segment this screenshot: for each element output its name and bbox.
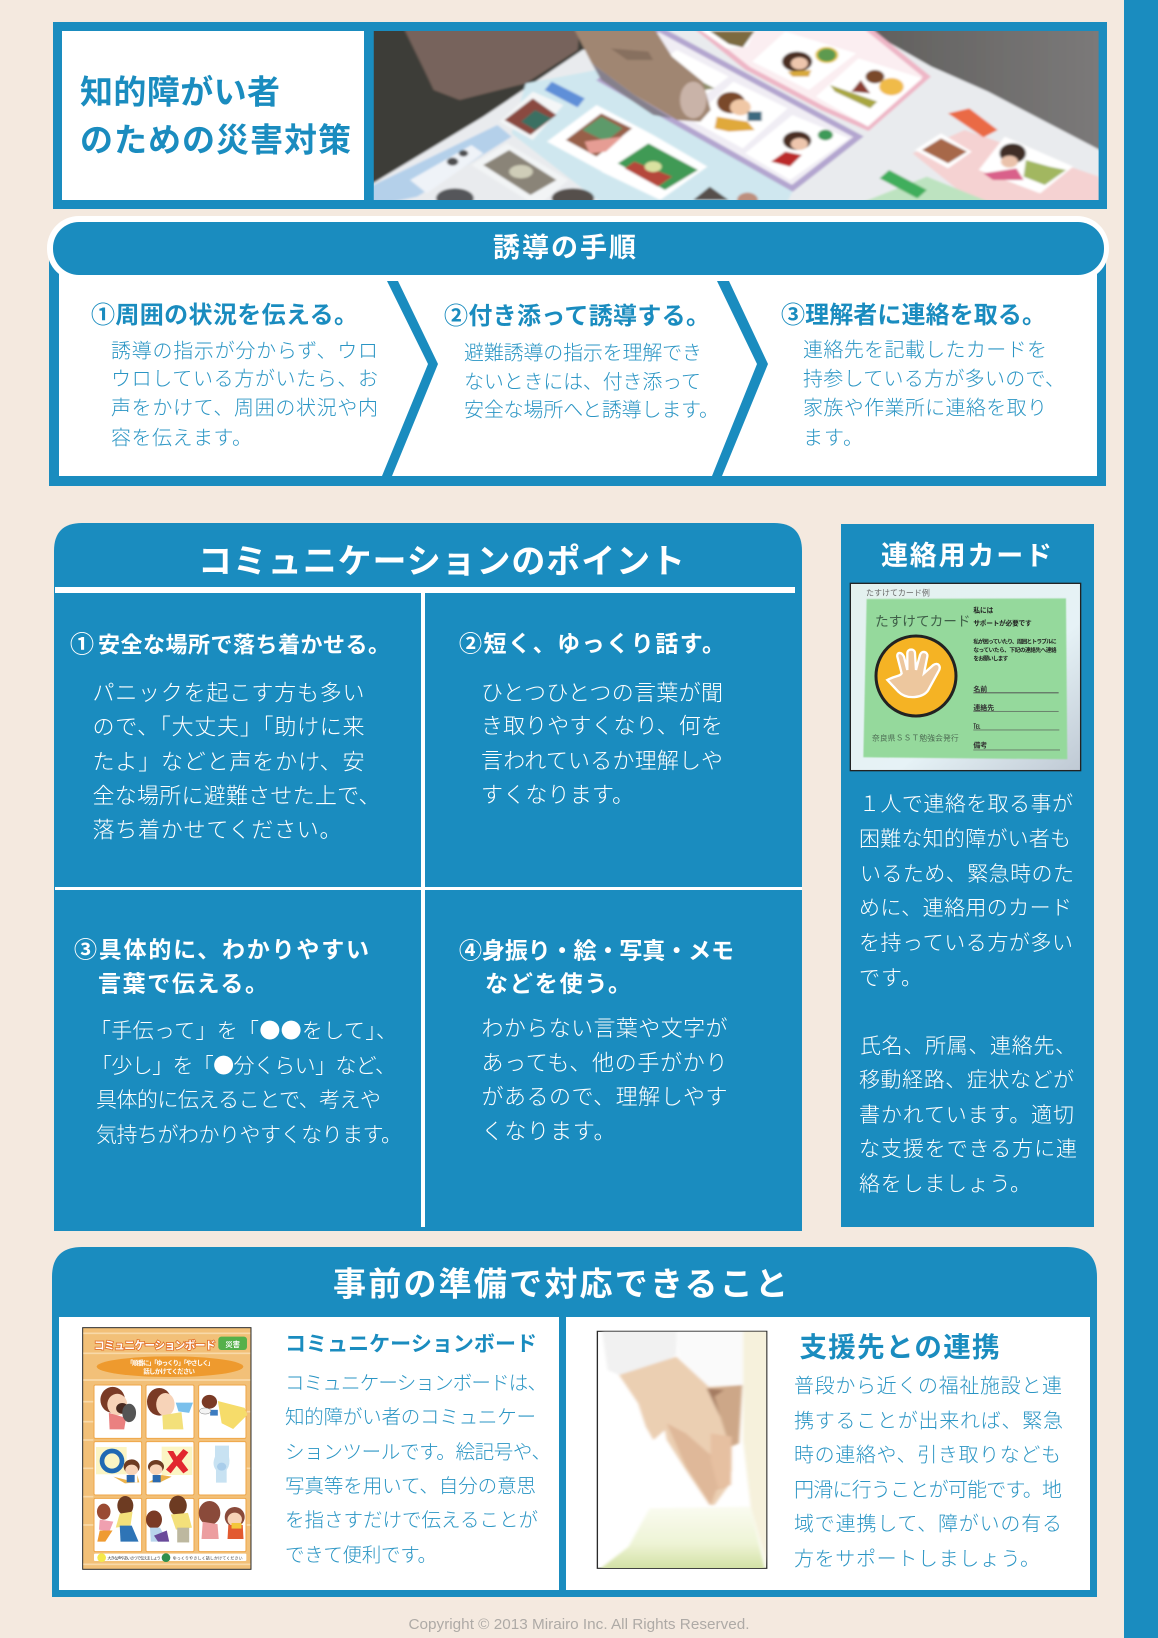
pictogram: drinking	[147, 1388, 193, 1429]
step 1: 誘導の指示が分からず、ウロ	[111, 335, 378, 364]
subsection: partner coordination: 時の連絡や、引き取りなども	[794, 1439, 1061, 1468]
poster: communication board	[83, 1328, 251, 1569]
photo: help card: 連絡先	[973, 703, 994, 713]
panel heading: コミュニケーションのポイント	[198, 534, 685, 583]
step 2: ②付き添って誘導する。	[444, 296, 710, 331]
step 3: ます。	[803, 422, 863, 451]
pictogram: yes	[96, 1447, 140, 1483]
panel: contact card	[841, 524, 1094, 1227]
poster: communication board: 「順番に」「ゆっくり」「やさしく」	[127, 1358, 214, 1367]
subsection: communication board: 知的障がい者のコミュニケー	[285, 1400, 536, 1429]
photo: help card: 私が困っていたり、周囲とトラブルに	[973, 636, 1057, 645]
panel text: 困難な知的障がい者も	[859, 823, 1071, 853]
step 3: ③理解者に連絡を取る。	[781, 295, 1046, 330]
photo: help card: 名前	[973, 685, 987, 695]
subsection: partner coordination: 域で連携して、障がいの有る	[794, 1508, 1062, 1537]
point 2: き取りやすくなり、何を	[481, 708, 723, 740]
point 1: 全な場所に避難させた上で、	[92, 778, 380, 810]
panel: advance preparation	[52, 1247, 1097, 1597]
step 2	[444, 296, 719, 423]
point 4: などを使う。	[485, 965, 631, 999]
step 1: 容を伝えます。	[111, 422, 252, 451]
pictogram: mother and child	[199, 1501, 245, 1539]
panel text: １人で連絡を取る事が	[859, 788, 1073, 818]
point 1: 安全な場所で落ち着かせる。	[98, 627, 390, 659]
panel text: めに、連絡用のカード	[859, 892, 1072, 922]
photo: help card: 奈良県ＳＳＴ勉強会発行	[872, 733, 959, 744]
copyright: Copyright © 2013 Mirairo Inc. All Rights Reserved.	[408, 1616, 750, 1633]
subsection: partner coordination: 普段から近くの福祉施設と連	[794, 1370, 1062, 1399]
right side band	[1124, 0, 1158, 1638]
poster: communication board: 大きな声やあいさつで伝えましょう	[107, 1554, 161, 1561]
heading bar: 誘導の手順	[493, 226, 636, 265]
panel text: を持っている方が多い	[859, 927, 1073, 957]
step 2: 避難誘導の指示を理解でき	[464, 337, 702, 366]
subsection: communication board: コミュニケーションボードは、	[285, 1366, 547, 1395]
point 3: 気持ちがわかりやすくなります。	[96, 1119, 402, 1149]
point 1: たよ」などと声をかけ、安	[92, 744, 364, 776]
point 1: ①	[70, 624, 94, 659]
step 2: ないときには、付き添って	[464, 366, 701, 395]
chevron arrow 1	[382, 281, 438, 476]
point 2: 言われているか理解しや	[481, 743, 723, 775]
panel text: 氏名、所属、連絡先、	[860, 1030, 1076, 1060]
photo: help card: なっていたら、下記の連絡先へ連絡	[973, 645, 1057, 654]
point 3: 「手伝って」を「●●をして」、	[90, 1015, 397, 1045]
panel text: いるため、緊急時のた	[860, 858, 1074, 888]
chevron arrow 2	[712, 281, 768, 476]
title: 知的障がい者	[80, 66, 280, 114]
subsection: partner coordination: 携することが出来れば、緊急	[794, 1405, 1063, 1434]
subsection: communication board: ションツールです。絵記号や、	[285, 1435, 551, 1464]
step 1: 声をかけて、周囲の状況や内	[111, 392, 378, 421]
point 4	[459, 932, 734, 1146]
step 3: 連絡先を記載したカードを	[803, 334, 1047, 363]
pictogram: walking together	[97, 1496, 139, 1542]
panel text: です。	[859, 962, 922, 992]
pictogram: helping	[146, 1496, 192, 1542]
panel text	[859, 788, 1077, 1198]
point 1: ので、「大丈夫」「助けに来	[92, 709, 364, 741]
point 1: 落ち着かせてください。	[92, 812, 342, 844]
pictogram: toilet	[214, 1446, 229, 1483]
section: guidance procedure	[47, 216, 1109, 486]
panel heading: 事前の準備で対応できること	[333, 1258, 788, 1306]
point 3: 「少し」を「●分くらい」など、	[91, 1050, 396, 1080]
subsection: communication board: できて便利です。	[285, 1538, 437, 1567]
point 3	[74, 931, 402, 1149]
panel text: な支援をできる方に連	[859, 1133, 1077, 1163]
panel text: 移動経路、症状などが	[859, 1064, 1074, 1094]
point 4: あっても、他の手がかり	[482, 1046, 728, 1078]
point 1: パニックを起こす方も多い	[92, 675, 364, 707]
photo: help card: たすけてカード	[875, 610, 971, 630]
step 3	[781, 295, 1065, 451]
photo: help card: たすけてカード例	[866, 587, 930, 598]
title	[80, 66, 351, 162]
step 1: ウロしている方がいたら、お	[111, 363, 378, 392]
point 4: わからない言葉や文字が	[482, 1011, 728, 1043]
panel: communication points	[54, 523, 802, 1231]
point 3: 具体的に伝えることで、考えや	[96, 1084, 381, 1114]
subsection: partner coordination: 円滑に行うことが可能です。地	[794, 1474, 1062, 1503]
point 4: くなります。	[482, 1114, 616, 1146]
subsection: partner coordination	[794, 1324, 1063, 1572]
photo: help card: ℡	[973, 721, 980, 731]
point 2: ②短く、ゆっくり話す。	[459, 625, 725, 659]
title: のための災害対策	[80, 114, 351, 162]
photo: help card	[850, 583, 1081, 771]
panel text: 書かれています。適切	[859, 1099, 1074, 1129]
point 2: すくなります。	[481, 777, 634, 809]
step 3: 持参している方が多いので、	[803, 363, 1065, 392]
panel text: 絡をしましょう。	[859, 1168, 1031, 1198]
pictogram: eating	[100, 1387, 136, 1429]
step 3: 家族や作業所に連絡を取り	[803, 392, 1047, 421]
subsection: communication board: を指さすだけで伝えることが	[285, 1503, 538, 1532]
photo: help card: 私には	[973, 605, 994, 615]
point 1	[70, 624, 390, 844]
step 1	[91, 295, 378, 451]
step 1: ①周囲の状況を伝える。	[91, 295, 358, 330]
step 2: 安全な場所へと誘導します。	[464, 394, 719, 423]
header photo: finger pointing at picture board	[370, 27, 1106, 208]
point 2	[459, 625, 725, 809]
subsection: communication board: 写真等を用いて、自分の意思	[285, 1469, 536, 1498]
point 4: ④身振り・絵・写真・メモ	[459, 932, 734, 966]
photo: help card: サポートが必要です	[973, 617, 1032, 627]
photo: help card: をお願いします	[973, 654, 1009, 663]
poster: communication board: コミュニケーションボード	[94, 1338, 216, 1353]
heading bar	[53, 222, 1104, 275]
photo: help card: 備考	[973, 740, 987, 750]
poster: communication board: 話しかけてください	[143, 1366, 195, 1375]
photo: holding hands	[594, 1330, 768, 1573]
pictogram: no	[148, 1447, 192, 1482]
point 3: ③具体的に、わかりやすい	[74, 931, 369, 965]
panel heading: 連絡用カード	[881, 534, 1052, 573]
pictogram: sleeping	[199, 1395, 247, 1429]
subsection: communication board: コミュニケーションボード	[285, 1328, 537, 1358]
header panel	[53, 22, 1107, 209]
subsection: communication board	[285, 1328, 551, 1567]
subsection: partner coordination: 支援先との連携	[800, 1324, 1000, 1364]
point 2: ひとつひとつの言葉が聞	[481, 675, 723, 707]
point 4: があるので、理解しやす	[482, 1080, 728, 1112]
poster: communication board: ゆっくりやさしく話しかけてください	[173, 1554, 243, 1561]
point 3: 言葉で伝える。	[98, 965, 268, 999]
subsection: partner coordination: 方をサポートしましょう。	[794, 1543, 1040, 1572]
poster: communication board: 災害	[225, 1339, 240, 1350]
